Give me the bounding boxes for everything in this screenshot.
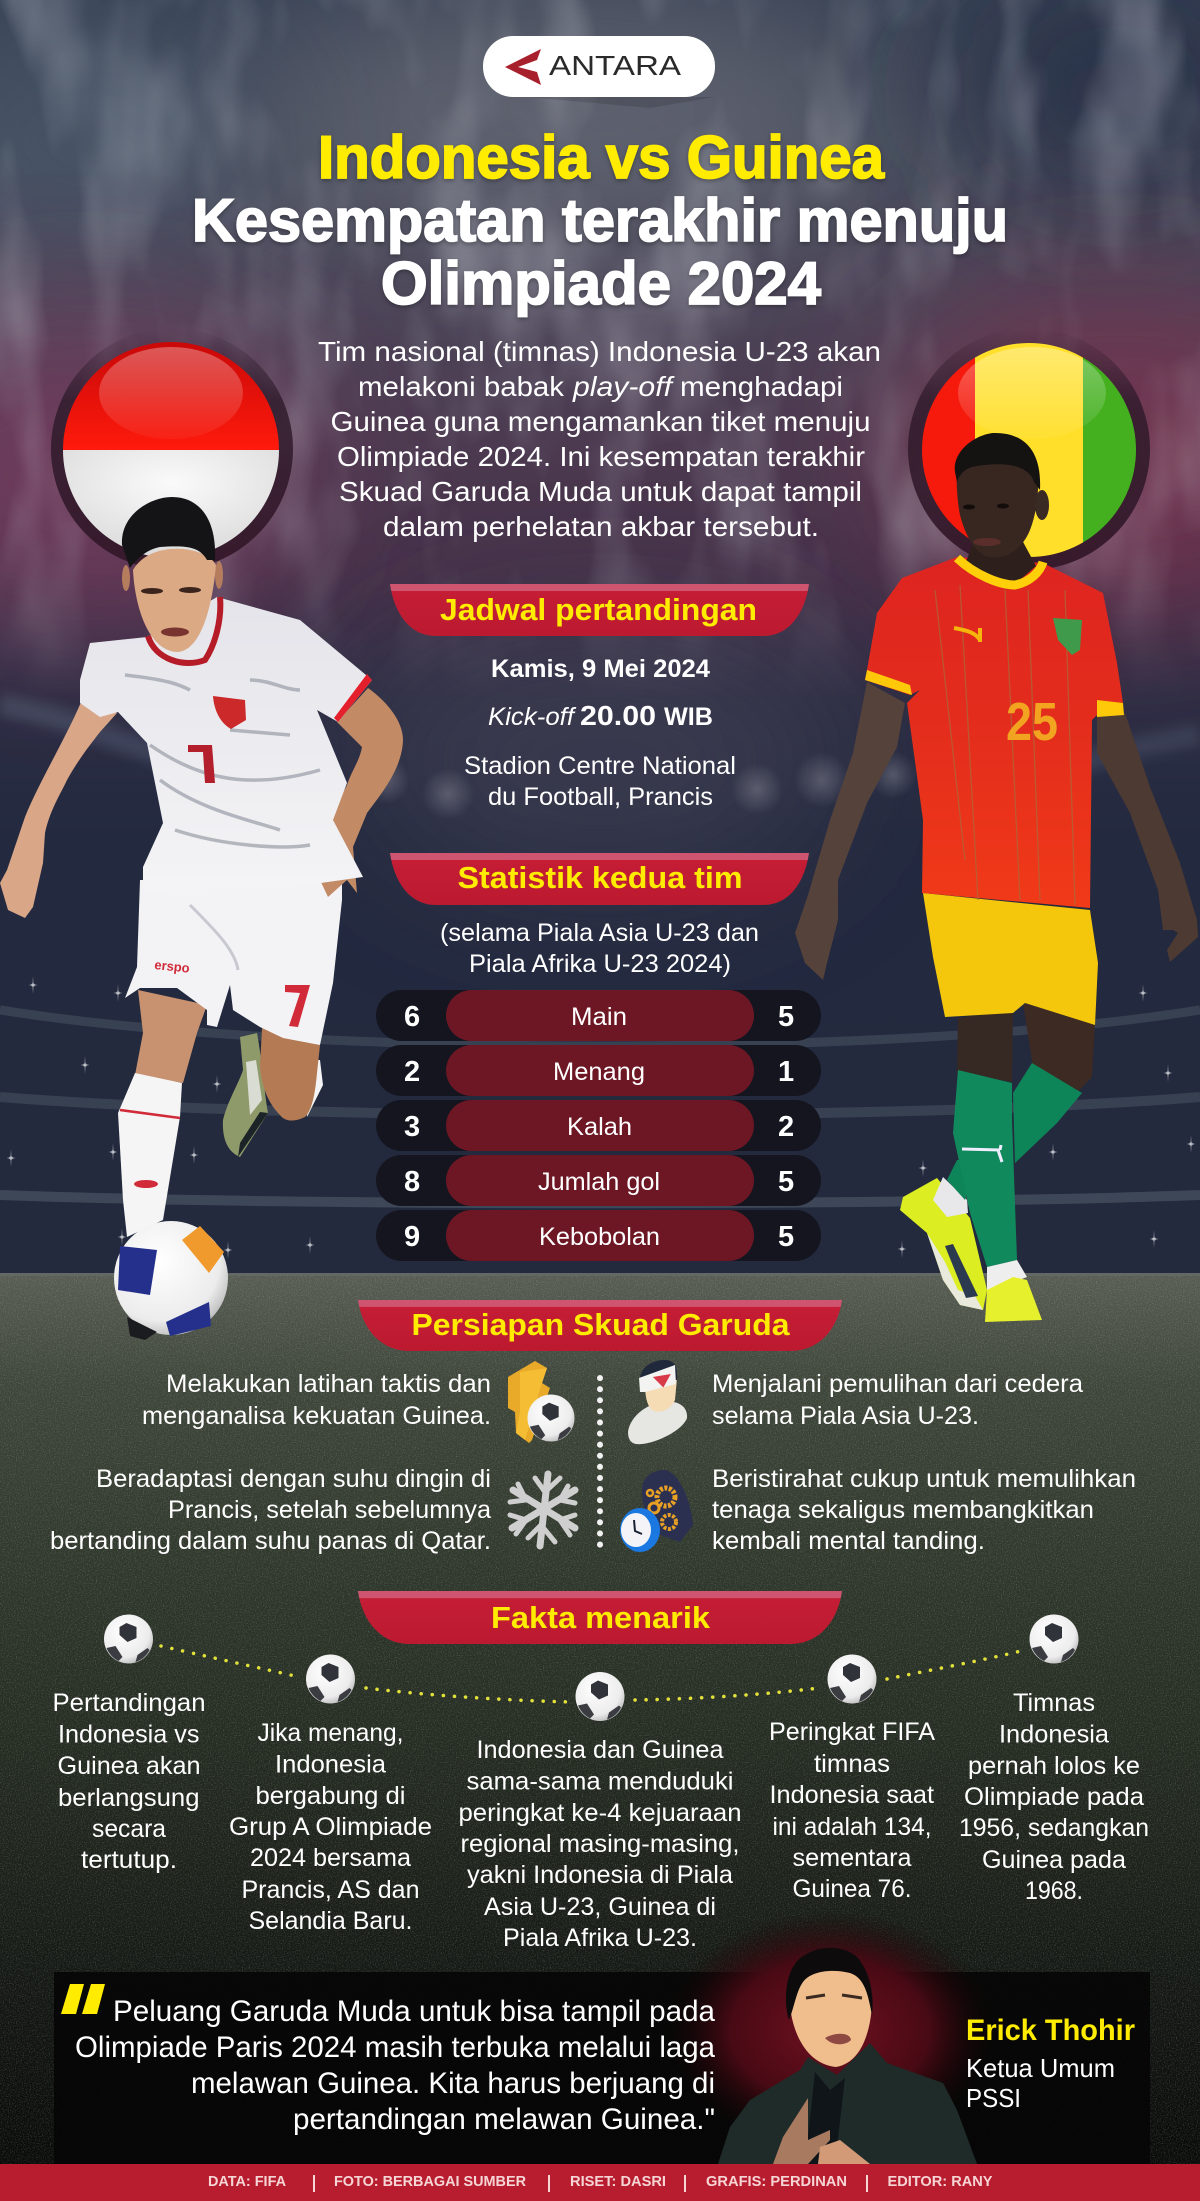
fact 4 <box>769 1654 935 1903</box>
jersey <box>80 597 372 890</box>
text: cold adaptation: Beradaptasi dengan suhu dingin di <box>96 1465 491 1493</box>
shorts <box>125 880 342 1045</box>
head <box>955 433 1049 586</box>
text: rest <box>712 1465 1136 1555</box>
fact 2: Prancis, AS dan <box>242 1876 420 1904</box>
row: Jumlah gol <box>376 1155 821 1206</box>
fact 1: Indonesia vs <box>58 1720 200 1748</box>
heading: Statistik kedua tim: Statistik kedua tim <box>458 860 742 895</box>
fact 3 <box>458 1672 742 1952</box>
fact 2: Grup A Olimpiade <box>229 1813 432 1841</box>
logo: Antara pill <box>483 36 715 108</box>
fact 5: 1968. <box>1025 1877 1083 1905</box>
back leg and boot <box>223 1028 323 1157</box>
fact 3: sama-sama menduduki <box>466 1768 734 1796</box>
panel: quote <box>54 1910 1150 2164</box>
heading: Statistik kedua tim <box>390 853 809 905</box>
text block: statistics note: (selama Piala Asia U-23 dan <box>440 919 759 947</box>
row: Main <box>376 990 821 1041</box>
quote text: Olimpiade Paris 2024 masih terbuka melalui laga <box>75 2031 715 2064</box>
icon: Guinea flag <box>908 328 1150 570</box>
intro text block <box>318 336 881 542</box>
text block: match schedule: du Football, Prancis <box>488 783 713 811</box>
fact 5 <box>959 1614 1149 1905</box>
fact 5: Indonesia <box>999 1720 1109 1748</box>
row: Kalah: Kalah <box>567 1113 632 1141</box>
caption: speaker: Erick Thohir <box>966 2014 1135 2047</box>
player: Guinea <box>795 433 1198 1322</box>
icon: ball <box>1030 1614 1078 1664</box>
icon: tactics bolt and ball <box>508 1361 575 1443</box>
fact 5: pernah lolos ke <box>968 1752 1140 1780</box>
text block: match schedule <box>464 655 736 811</box>
logo: Antara pill: ANTARA <box>549 50 681 81</box>
fact 2: Indonesia <box>275 1750 386 1778</box>
intro text block: dalam perhelatan akbar tersebut. <box>383 511 819 542</box>
fact 2: 2024 bersama <box>250 1844 411 1872</box>
fact 3: Piala Afrika U-23. <box>503 1924 697 1952</box>
caption: speaker: PSSI <box>966 2083 1021 2113</box>
fact 1: Guinea akan <box>58 1752 200 1780</box>
text: cold adaptation: bertanding dalam suhu panas di Qatar. <box>50 1527 491 1555</box>
left arm <box>0 700 117 918</box>
heading: Persiapan Skuad Garuda <box>358 1300 842 1351</box>
icon: quote mark <box>61 1984 105 2014</box>
fact 2: Jika menang, <box>258 1719 404 1747</box>
fact 5: Timnas <box>1013 1689 1095 1717</box>
fact 3: peringkat ke-4 kejuaraan <box>458 1799 742 1827</box>
text block: match schedule: Kick-off <box>488 703 577 731</box>
fact 5: Olimpiade pada <box>964 1783 1144 1811</box>
intro text block: Skuad Garuda Muda untuk dapat tampil <box>339 476 862 507</box>
text: tactical training <box>142 1370 491 1430</box>
text block: match schedule: Kamis, 9 Mei 2024 <box>491 655 710 683</box>
text block: match schedule: Stadion Centre National <box>464 752 736 780</box>
heading: Jadwal pertandingan <box>390 584 809 636</box>
left arm <box>795 682 905 980</box>
shorts: erspo <box>154 957 191 976</box>
fact 2: Selandia Baru. <box>248 1907 412 1935</box>
player: Indonesia <box>0 497 403 1340</box>
icon: ball <box>828 1654 876 1704</box>
row: Kalah: 2 <box>778 1111 794 1143</box>
fact 5: Guinea pada <box>982 1846 1126 1874</box>
icon: snowflake <box>510 1474 575 1546</box>
row: Menang: Menang <box>553 1058 645 1086</box>
row: Jumlah gol: 5 <box>778 1166 794 1198</box>
fact 3: regional masing-masing, <box>460 1830 740 1858</box>
jersey <box>865 557 1124 908</box>
fact 2 <box>229 1654 432 1935</box>
text: rest: tenaga sekaligus membangkitkan <box>712 1496 1094 1524</box>
fact 1: secara <box>92 1815 166 1843</box>
ball <box>114 1221 228 1340</box>
row: Menang: 2 <box>404 1056 420 1088</box>
icon: ball <box>306 1654 355 1704</box>
left leg and sock <box>118 990 207 1237</box>
row: Jumlah gol: Jumlah gol <box>538 1168 660 1196</box>
icon: Antara arrow mark <box>505 49 541 85</box>
fact 1: tertutup. <box>81 1846 177 1874</box>
right arm <box>1097 713 1198 962</box>
fact 4: timnas <box>814 1750 890 1778</box>
text: tactical training: menganalisa kekuatan Guinea. <box>142 1402 491 1430</box>
row: Kalah: 3 <box>404 1111 420 1143</box>
footer: credits bar: GRAFIS: PERDINAN <box>706 2173 847 2190</box>
title: Indonesia vs Guinea <box>318 124 885 191</box>
row: Kalah <box>376 1100 821 1151</box>
text: rest: Beristirahat cukup untuk memulihkan <box>712 1465 1136 1493</box>
footer: credits bar: EDITOR: RANY <box>888 2173 992 2190</box>
row: Main: 6 <box>404 1001 420 1033</box>
fact 4: Guinea 76. <box>792 1875 912 1903</box>
icon: ball <box>576 1672 624 1721</box>
intro text block: play-off <box>572 371 675 402</box>
icon: injured head <box>628 1360 687 1444</box>
caption: speaker: Ketua Umum <box>966 2053 1115 2083</box>
text: injury recovery: selama Piala Asia U-23. <box>712 1402 979 1430</box>
row: Kebobolan <box>376 1210 821 1261</box>
legs <box>957 1003 1095 1097</box>
heading: Fakta menarik: Fakta menarik <box>491 1600 711 1635</box>
heading: Jadwal pertandingan: Jadwal pertandingan <box>440 592 757 627</box>
socks <box>947 1063 1082 1267</box>
intro text block: melakoni babak <box>358 371 565 402</box>
fact 3: Indonesia dan Guinea <box>476 1736 724 1764</box>
shorts <box>923 893 1098 1025</box>
back boot <box>900 1177 987 1310</box>
timeline: dotted path <box>161 1646 1025 1702</box>
icon: gears and clock <box>620 1470 693 1552</box>
intro text block: Tim nasional (timnas) Indonesia U-23 akan <box>318 336 881 367</box>
row: Main: Main <box>571 1003 627 1031</box>
head <box>122 497 223 652</box>
fact 4: Peringkat FIFA <box>769 1718 935 1746</box>
icon: ball <box>104 1614 153 1664</box>
footer: credits bar: RISET: DASRI <box>570 2173 666 2190</box>
background: stadium sky <box>0 0 1200 1273</box>
intro text block: Guinea guna mengamankan tiket menuju <box>330 406 870 437</box>
text: tactical training: Melakukan latihan taktis dan <box>166 1370 491 1398</box>
text block: statistics note <box>440 919 759 978</box>
quote text: pertandingan melawan Guinea." <box>293 2103 715 2136</box>
row: Kebobolan: Kebobolan <box>539 1223 660 1251</box>
fact 4: ini adalah 134, <box>772 1813 932 1841</box>
row: Menang: 1 <box>778 1056 794 1088</box>
footer: credits bar <box>0 2164 1200 2201</box>
jersey collar <box>957 558 1043 585</box>
text: injury recovery <box>712 1370 1083 1430</box>
text: cold adaptation: Prancis, setelah sebelumnya <box>168 1496 491 1524</box>
divider: dotted line <box>597 1378 603 1545</box>
fact 3: Asia U-23, Guinea di <box>484 1893 716 1921</box>
heading: Persiapan Skuad Garuda: Persiapan Skuad Garuda <box>412 1307 790 1342</box>
text: rest: kembali mental tanding. <box>712 1527 985 1555</box>
intro text block: Olimpiade 2024. Ini kesempatan terakhir <box>337 441 865 472</box>
row: Main: 5 <box>778 1001 794 1033</box>
quote text: melawan Guinea. Kita harus berjuang di <box>191 2067 715 2100</box>
fact 2: bergabung di <box>256 1782 406 1810</box>
text block: match schedule: 20.00 <box>580 700 656 731</box>
heading: Fakta menarik <box>358 1591 842 1644</box>
quote text: Peluang Garuda Muda untuk bisa tampil pada <box>113 1995 715 2028</box>
text: cold adaptation <box>50 1465 491 1555</box>
title <box>192 124 1008 317</box>
fact 4: Indonesia saat <box>770 1781 934 1809</box>
right arm <box>295 688 403 897</box>
caption: speaker <box>966 2014 1135 2113</box>
background: grass pitch <box>0 1273 1200 2201</box>
text block: match schedule: WIB <box>664 703 713 731</box>
fact 1 <box>52 1614 206 1874</box>
text block: statistics note: Piala Afrika U-23 2024) <box>469 950 731 978</box>
fact 5: 1956, sedangkan <box>959 1814 1149 1842</box>
text: injury recovery: Menjalani pemulihan dari cedera <box>712 1370 1083 1398</box>
row: Kebobolan: 5 <box>778 1221 794 1253</box>
front boot <box>985 1260 1042 1322</box>
stadium stands <box>0 976 1200 1259</box>
illustration: Erick Thohir <box>718 1948 977 2164</box>
footer: credits bar: DATA: FIFA <box>208 2173 286 2190</box>
icon: Indonesia flag <box>51 328 293 570</box>
row: Jumlah gol: 8 <box>404 1166 420 1198</box>
title: Kesempatan terakhir menuju <box>192 187 1008 254</box>
table: team statistics <box>376 990 821 1261</box>
fact 1: Pertandingan <box>52 1689 206 1717</box>
fact 4: sementara <box>792 1844 912 1872</box>
row: Kebobolan: 9 <box>404 1221 420 1253</box>
quote text <box>75 1995 715 2136</box>
fact 3: yakni Indonesia di Piala <box>467 1861 733 1889</box>
footer: credits bar: FOTO: BERBAGAI SUMBER <box>334 2173 526 2190</box>
fact 1: berlangsung <box>58 1784 200 1812</box>
title: Olimpiade 2024 <box>381 250 822 317</box>
row: Menang <box>376 1045 821 1096</box>
jersey: 25 <box>1006 692 1058 752</box>
intro text block: menghadapi <box>680 371 843 402</box>
